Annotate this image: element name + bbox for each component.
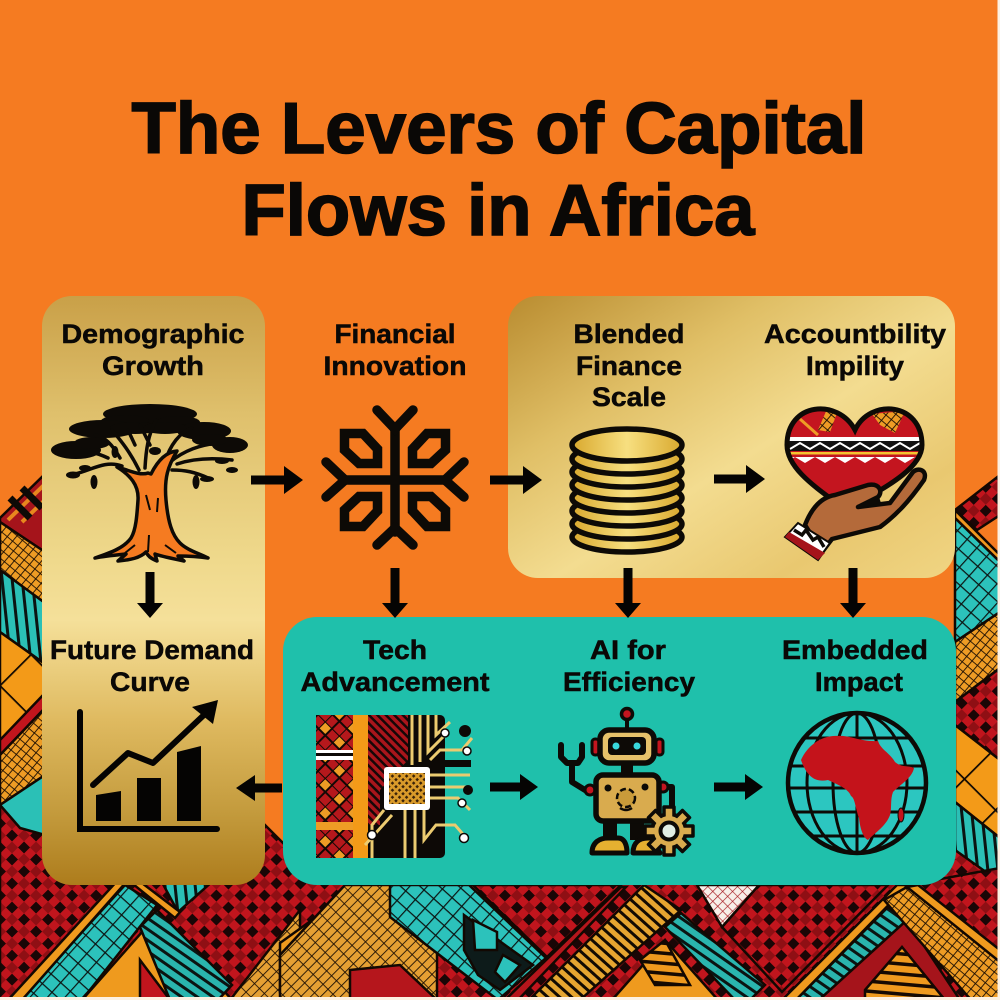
label: Blended Finance Scale: Blended xyxy=(574,319,684,349)
arrow: tech to AI xyxy=(490,774,538,800)
label: Tech Advancement xyxy=(300,635,490,697)
label: Blended Finance Scale: Finance xyxy=(576,351,682,381)
label: Future Demand Curve: Curve xyxy=(110,667,190,697)
label: Tech Advancement: Advancement xyxy=(300,667,490,697)
title: The Levers of Capital xyxy=(132,89,866,169)
icon: growth chart xyxy=(80,700,218,829)
label: Tech Advancement: Tech xyxy=(363,635,427,665)
label: Blended Finance Scale: Scale xyxy=(592,382,666,412)
panel: gold upper right xyxy=(508,296,955,578)
panel: teal lower right xyxy=(283,617,956,885)
label: AI for Efficiency: AI for xyxy=(590,635,667,665)
icon: baobab tree xyxy=(51,404,248,561)
label: Financial Innovation xyxy=(324,319,466,381)
arrow: blended to accountability xyxy=(714,465,765,493)
arrow: blended to AI xyxy=(615,568,641,618)
title xyxy=(132,89,866,251)
label: Demographic Growth xyxy=(62,319,244,381)
title: Flows in Africa xyxy=(242,171,755,251)
label: Future Demand Curve xyxy=(50,635,254,697)
label: AI for Efficiency xyxy=(563,635,695,697)
arrow: demographic to financial xyxy=(251,466,303,494)
arrow: AI to embedded xyxy=(714,774,763,800)
label: Financial Innovation: Financial xyxy=(334,319,456,349)
icon: patterned heart in hand xyxy=(785,409,925,560)
label: Demographic Growth: Growth xyxy=(102,351,204,381)
icon: textile circuit chip xyxy=(316,715,473,858)
label: Financial Innovation: Innovation xyxy=(324,351,466,381)
icon: globe with Africa xyxy=(780,710,935,856)
left bottom xyxy=(157,873,222,912)
arrow: tree to future demand xyxy=(137,572,163,618)
icon: robot with gear xyxy=(561,708,693,855)
label: Embedded Impact: Impact xyxy=(815,667,903,697)
background: African textile pattern xyxy=(0,474,1000,1000)
label: Embedded Impact xyxy=(782,635,928,697)
label: Future Demand Curve: Future Demand xyxy=(50,635,254,665)
label: Accountbility Impility: Accountbility xyxy=(764,319,946,349)
arrow: financial to blended xyxy=(490,466,542,494)
label: Accountbility Impility: Impility xyxy=(806,351,904,381)
label: Embedded Impact: Embedded xyxy=(782,635,928,665)
icon: financial innovation snowflake xyxy=(326,410,464,545)
centre bottom xyxy=(280,887,362,990)
label: AI for Efficiency: Efficiency xyxy=(563,667,695,697)
arrow: tech to future demand xyxy=(236,775,282,801)
label: Accountbility Impility xyxy=(764,319,946,381)
arrow: accountability to embedded xyxy=(840,568,866,618)
right bottom xyxy=(782,885,908,1000)
label: Blended Finance Scale xyxy=(574,319,684,412)
arrow: financial to tech xyxy=(382,568,408,618)
icon: coin stack xyxy=(572,429,682,552)
label: Demographic Growth: Demographic xyxy=(62,319,244,349)
panel: gold column xyxy=(42,296,265,885)
